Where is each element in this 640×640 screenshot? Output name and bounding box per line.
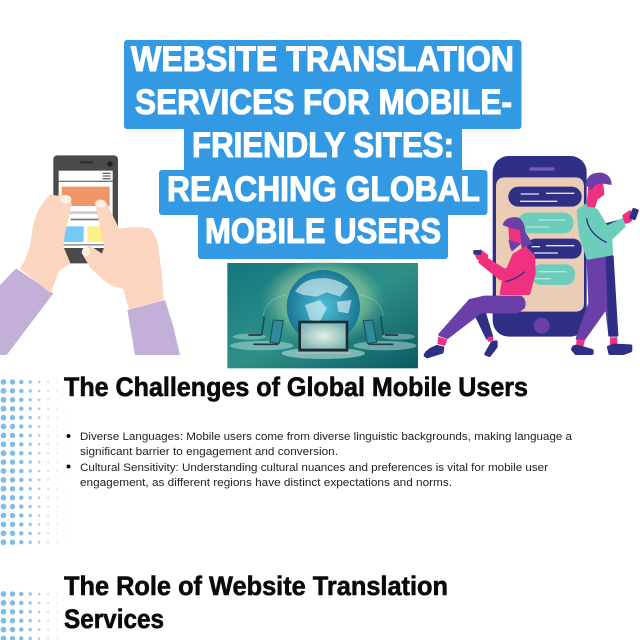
heading: The Challenges of Global Mobile Users: The Challenges of Global Mobile Users	[64, 372, 528, 402]
bullet list: challenges: significant barrier to engagement and conversion.	[80, 446, 338, 458]
title banner	[124, 40, 522, 259]
illustration: hands holding a smartphone	[0, 155, 180, 355]
image: globe and networked laptops	[227, 260, 418, 368]
title banner: REACHING GLOBAL	[167, 170, 480, 209]
heading: The Role of Website Translation Services: The Role of Website Translation	[64, 571, 448, 601]
bullet list: challenges: engagement, as different regions have distinct expectations and norms.	[80, 477, 452, 489]
bullet list: challenges	[66, 431, 573, 489]
title banner: WEBSITE TRANSLATION	[131, 40, 514, 79]
title banner: SERVICES FOR MOBILE-	[135, 83, 512, 122]
decorative dot pattern: lower left	[4, 594, 57, 640]
decorative dot pattern: upper left	[4, 382, 66, 546]
bullet list: challenges: Cultural Sensitivity: Understanding cultural nuances and preferences is vital for mobile user	[80, 462, 548, 474]
title banner: MOBILE USERS	[205, 212, 441, 251]
woman	[425, 217, 534, 357]
man	[573, 173, 639, 353]
heading: The Role of Website Translation Services	[64, 571, 448, 634]
illustration: two people using phones beside a giant smartphone	[425, 156, 639, 357]
title banner: FRIENDLY SITES:	[192, 126, 454, 165]
bullet list: challenges: Diverse Languages: Mobile users come from diverse linguistic backgrounds, making language a	[80, 431, 573, 443]
heading: The Role of Website Translation Services: Services	[64, 604, 164, 634]
